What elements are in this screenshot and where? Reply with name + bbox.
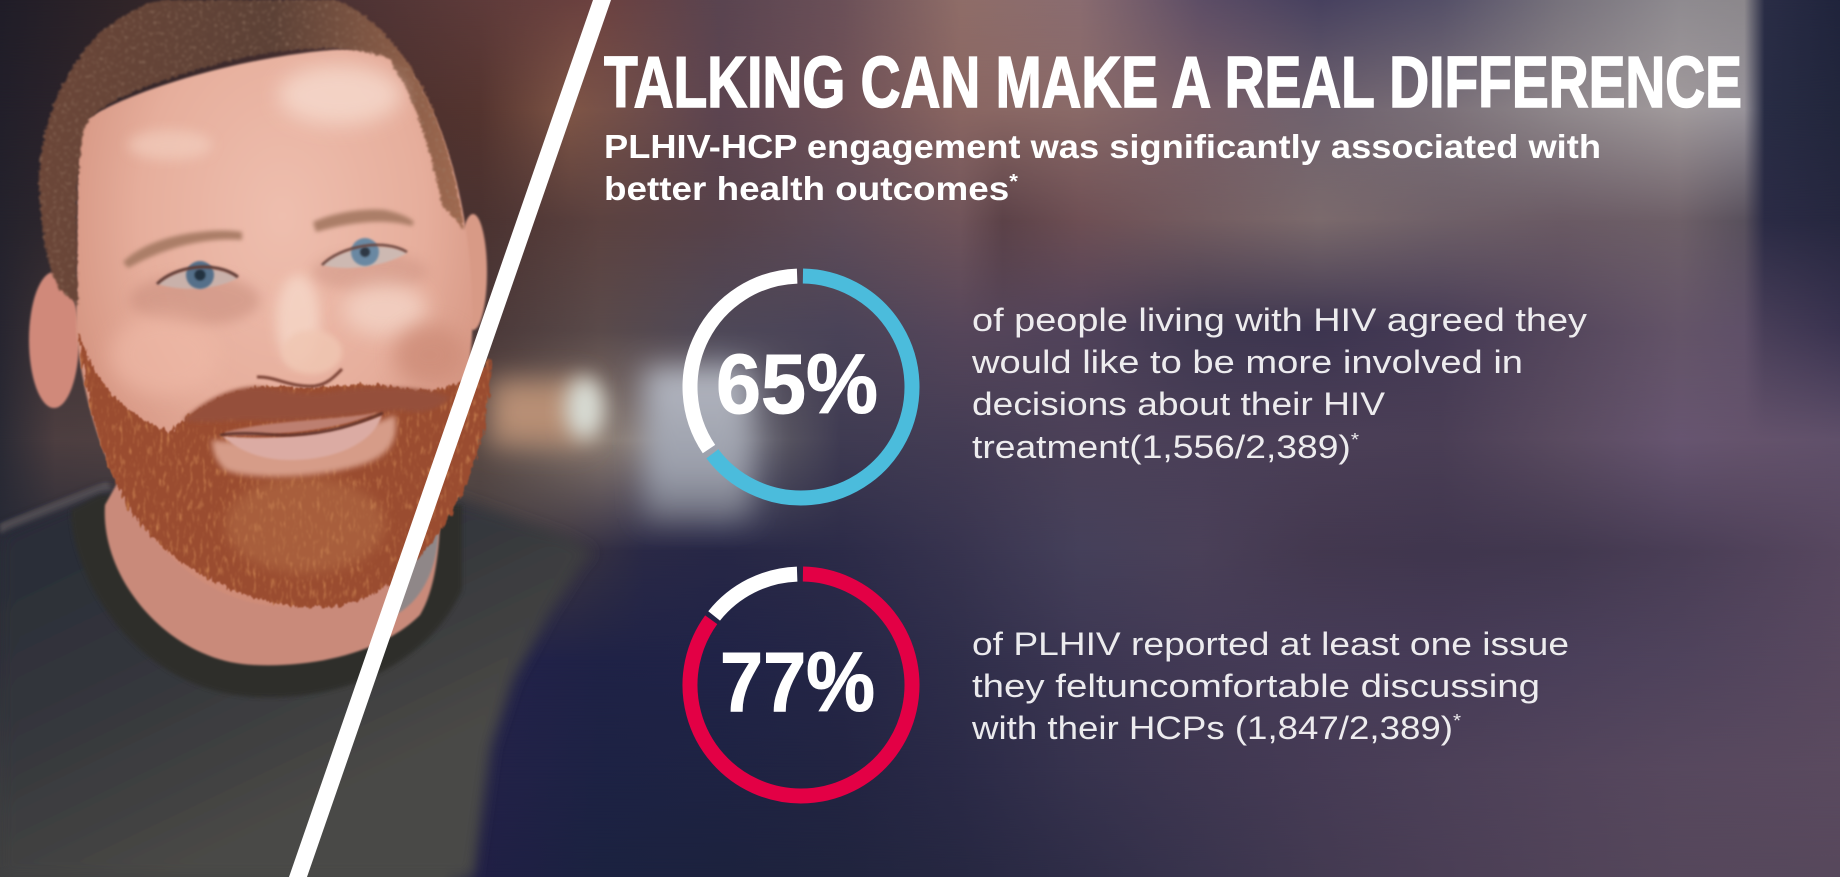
subtitle: better health outcomes <box>604 170 967 207</box>
grey patch right of divider <box>395 525 438 615</box>
left ear <box>29 272 79 408</box>
lower lip <box>222 415 382 460</box>
stat text: uncomfortable issues: with their HCPs (1,847/2,389) <box>972 710 1392 746</box>
right eyebrow <box>313 210 414 232</box>
stat text: involvement in decisions: decisions about their HIV <box>972 386 1386 422</box>
stat text: involvement in decisions: * <box>1351 430 1359 450</box>
cheek shadow right <box>394 325 466 385</box>
ring segment: 77% red <box>690 574 912 796</box>
stat text: involvement in decisions: treatment(1,556/2,389) <box>972 429 1298 465</box>
stat text: uncomfortable issues: of PLHIV reported at least one issue <box>972 626 1569 662</box>
right eye <box>322 238 407 268</box>
subtitle: PLHIV-HCP engagement was significantly associated with <box>604 128 1601 165</box>
stat value: 65%: 65% <box>716 337 878 431</box>
stat value: 77%: 77% <box>720 635 875 729</box>
eye socket shadow left <box>130 274 260 326</box>
head skin <box>76 49 473 607</box>
left eye <box>157 261 238 289</box>
ring segment: remainder white <box>690 276 797 449</box>
stat text: uncomfortable issues: they feltuncomfortable discussing <box>972 668 1540 704</box>
nose tip <box>282 330 342 374</box>
nostril line <box>257 369 342 386</box>
stat text: uncomfortable issues: * <box>1453 711 1461 731</box>
skin below lip <box>212 415 396 477</box>
mouth line <box>220 413 383 435</box>
upper lip <box>225 412 380 435</box>
shoulder strip behind the man <box>0 482 112 534</box>
subtitle <box>604 128 1601 207</box>
nose bridge highlight <box>276 275 320 365</box>
right ear <box>459 214 487 330</box>
ring segment: 65% blue <box>712 276 912 498</box>
diagonal white divider <box>289 0 611 877</box>
beard <box>78 330 490 607</box>
ring segment: remainder white <box>714 574 797 616</box>
neck <box>105 460 440 665</box>
stat: 77% ring <box>690 574 912 796</box>
eye socket shadow right <box>312 252 428 292</box>
portrait of smiling man <box>0 0 593 877</box>
cheek left <box>110 315 220 395</box>
hair <box>39 0 464 305</box>
forehead highlight left <box>128 130 212 160</box>
stat text: uncomfortable issues <box>971 626 1569 746</box>
stat: 65% ring <box>690 276 912 498</box>
stat text: involvement in decisions: of people living with HIV agreed they <box>972 302 1587 338</box>
moustache <box>183 387 450 422</box>
stat text: involvement in decisions: would like to be more involved in <box>971 344 1523 380</box>
stat text: involvement in decisions <box>971 302 1587 465</box>
chin beard lighter centre <box>225 477 385 573</box>
subtitle: * <box>1009 171 1018 193</box>
t-shirt <box>0 490 593 877</box>
forehead highlight right <box>278 65 402 125</box>
collar <box>71 495 462 697</box>
cheek highlight right <box>343 284 427 336</box>
left eyebrow <box>123 230 242 268</box>
